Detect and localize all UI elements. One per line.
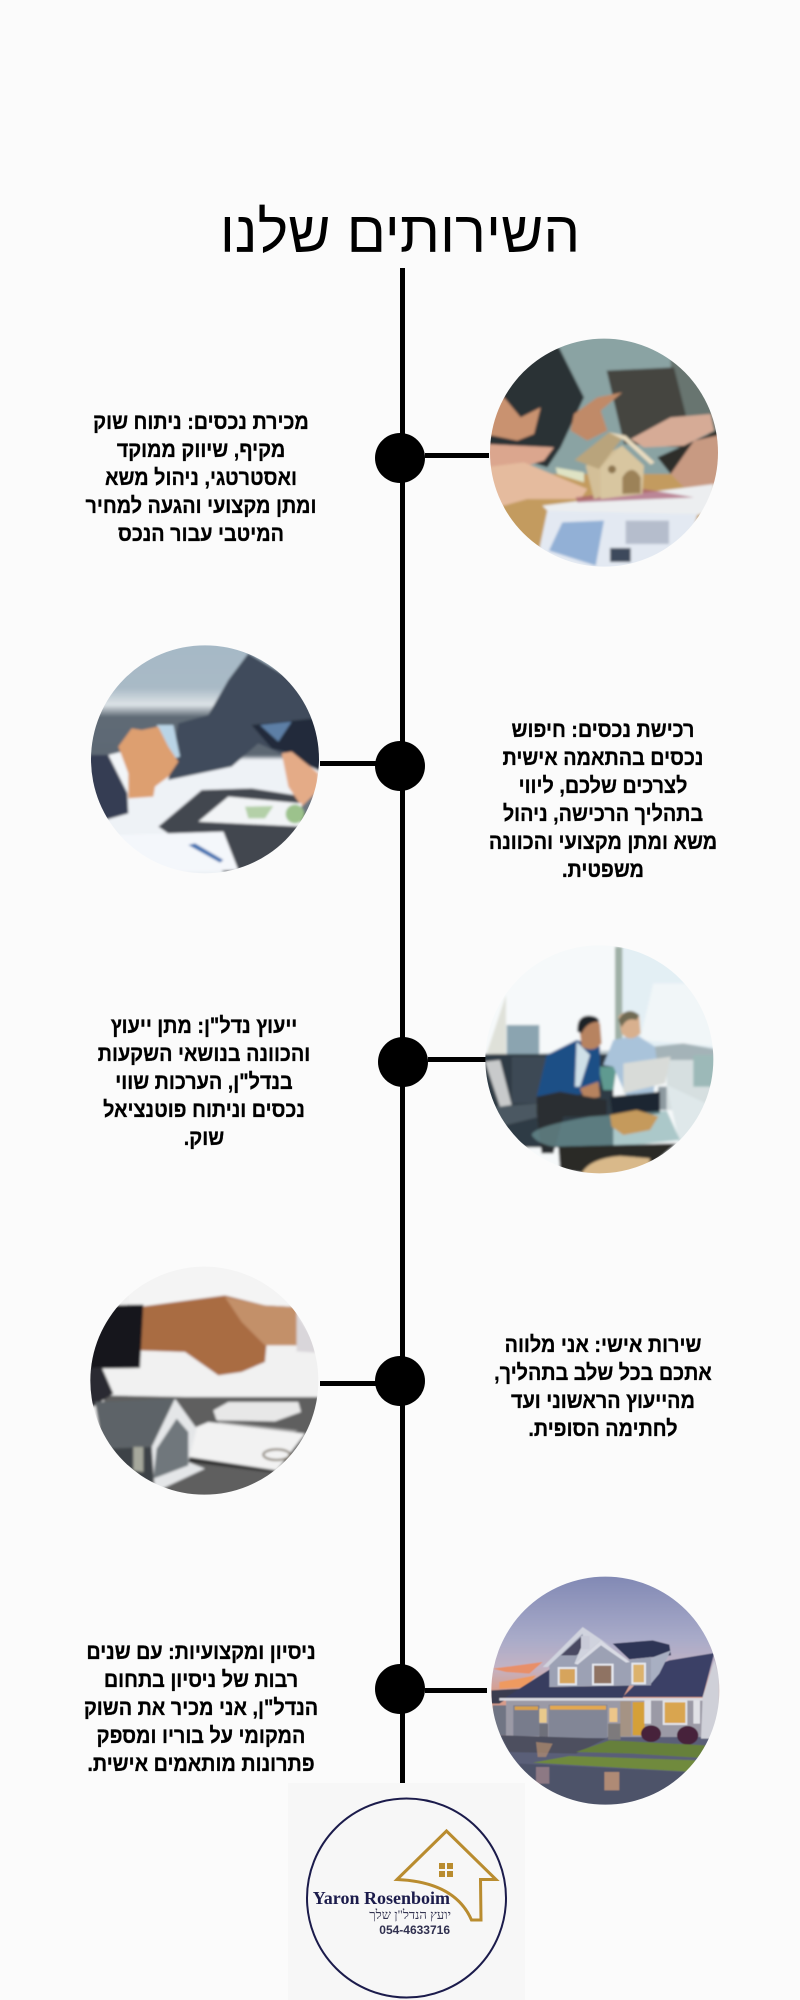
connector 3: [428, 1057, 486, 1062]
service text 1: sales: מכירת נכסים: ניתוח שוק: [93, 409, 309, 434]
service text 5: experience: רבות של ניסיון בתחום: [104, 1667, 298, 1692]
service text 4: personal service: אתכם בכל שלב בתהליך,: [494, 1360, 712, 1385]
connector 5: [425, 1688, 487, 1693]
service text 1: sales: [85, 409, 317, 546]
service text 2: purchase: בתהליך הרכישה, ניהול: [503, 801, 703, 826]
timeline dot 3: [378, 1037, 428, 1087]
connector 1: [425, 453, 489, 458]
service text 3: consulting: בנדל"ן, הערכות שווי: [115, 1069, 293, 1094]
service text 4: personal service: [494, 1332, 712, 1441]
service text 2: purchase: נכסים בהתאמה אישית: [503, 745, 703, 770]
service text 5: experience: ניסיון ומקצועיות: עם שנים: [86, 1639, 316, 1664]
logo: [306, 1798, 507, 1998]
service text 2: purchase: משפטית.: [562, 857, 644, 882]
service text 3: consulting: [98, 1013, 310, 1150]
service text 3: consulting: נכסים וניתוח פוטנציאל: [103, 1097, 305, 1122]
logo ring: [307, 1798, 506, 1998]
service text 1: sales: המיטבי עבור הנכס: [118, 521, 284, 546]
service text 2: purchase: רכישת נכסים: חיפוש: [512, 717, 694, 742]
photo 5: house at dusk: [491, 1576, 720, 1805]
connector 4: [320, 1381, 378, 1386]
logo name: Yaron Rosenboim: [313, 1888, 450, 1908]
timeline dot 2: [375, 741, 425, 791]
logo phone: 054-4633716: [379, 1923, 450, 1937]
timeline dot 5: [375, 1664, 425, 1714]
connector 2: [320, 761, 378, 766]
photo 3: two men with laptop on sofa: [485, 946, 714, 1174]
photo 2: business handshake: [91, 645, 319, 874]
service text 2: purchase: לצרכים שלכם, ליווי: [519, 773, 687, 798]
service text 5: experience: [84, 1639, 318, 1776]
service text 1: sales: ומתן מקצועי והגעה למחיר: [85, 493, 317, 518]
photo 4: handshake over model house: [90, 1293, 318, 1495]
service text 5: experience: פתרונות מותאמים אישית.: [87, 1751, 315, 1776]
logo tagline: יועץ הנדל"ן שלך: [369, 1907, 451, 1922]
logo house outline: [397, 1831, 496, 1920]
logo window: [439, 1863, 453, 1877]
service text 5: experience: המקומי על בוריו ומספק: [97, 1723, 305, 1748]
service text 4: personal service: לחתימה הסופית.: [528, 1416, 678, 1441]
service text 1: sales: ואסטרטגי, ניהול משא: [105, 465, 297, 490]
timeline dot 4: [375, 1356, 425, 1406]
timeline dot 1: [375, 433, 425, 483]
service text 3: consulting: שוק.: [184, 1125, 224, 1150]
service text 3: consulting: והכוונה בנושאי השקעות: [98, 1041, 310, 1066]
title: השירותים שלנו: [220, 200, 580, 265]
timeline vertical line: [400, 268, 405, 1783]
photo 1: hands around model house: [490, 338, 718, 566]
logo background panel: [288, 1783, 525, 2000]
service text 2: purchase: משא ומתן מקצועי והכוונה: [489, 829, 717, 854]
service text 4: personal service: שירות אישי: אני מלווה: [505, 1332, 701, 1357]
service text 1: sales: מקיף, שיווק ממוקד: [117, 437, 285, 462]
service text 2: purchase: [489, 717, 717, 882]
service text 4: personal service: מהייעוץ הראשוני ועד: [511, 1388, 695, 1413]
service text 5: experience: הנדל"ן, אני מכיר את השוק: [84, 1695, 318, 1720]
service text 3: consulting: ייעוץ נדל"ן: מתן ייעוץ: [111, 1013, 297, 1038]
